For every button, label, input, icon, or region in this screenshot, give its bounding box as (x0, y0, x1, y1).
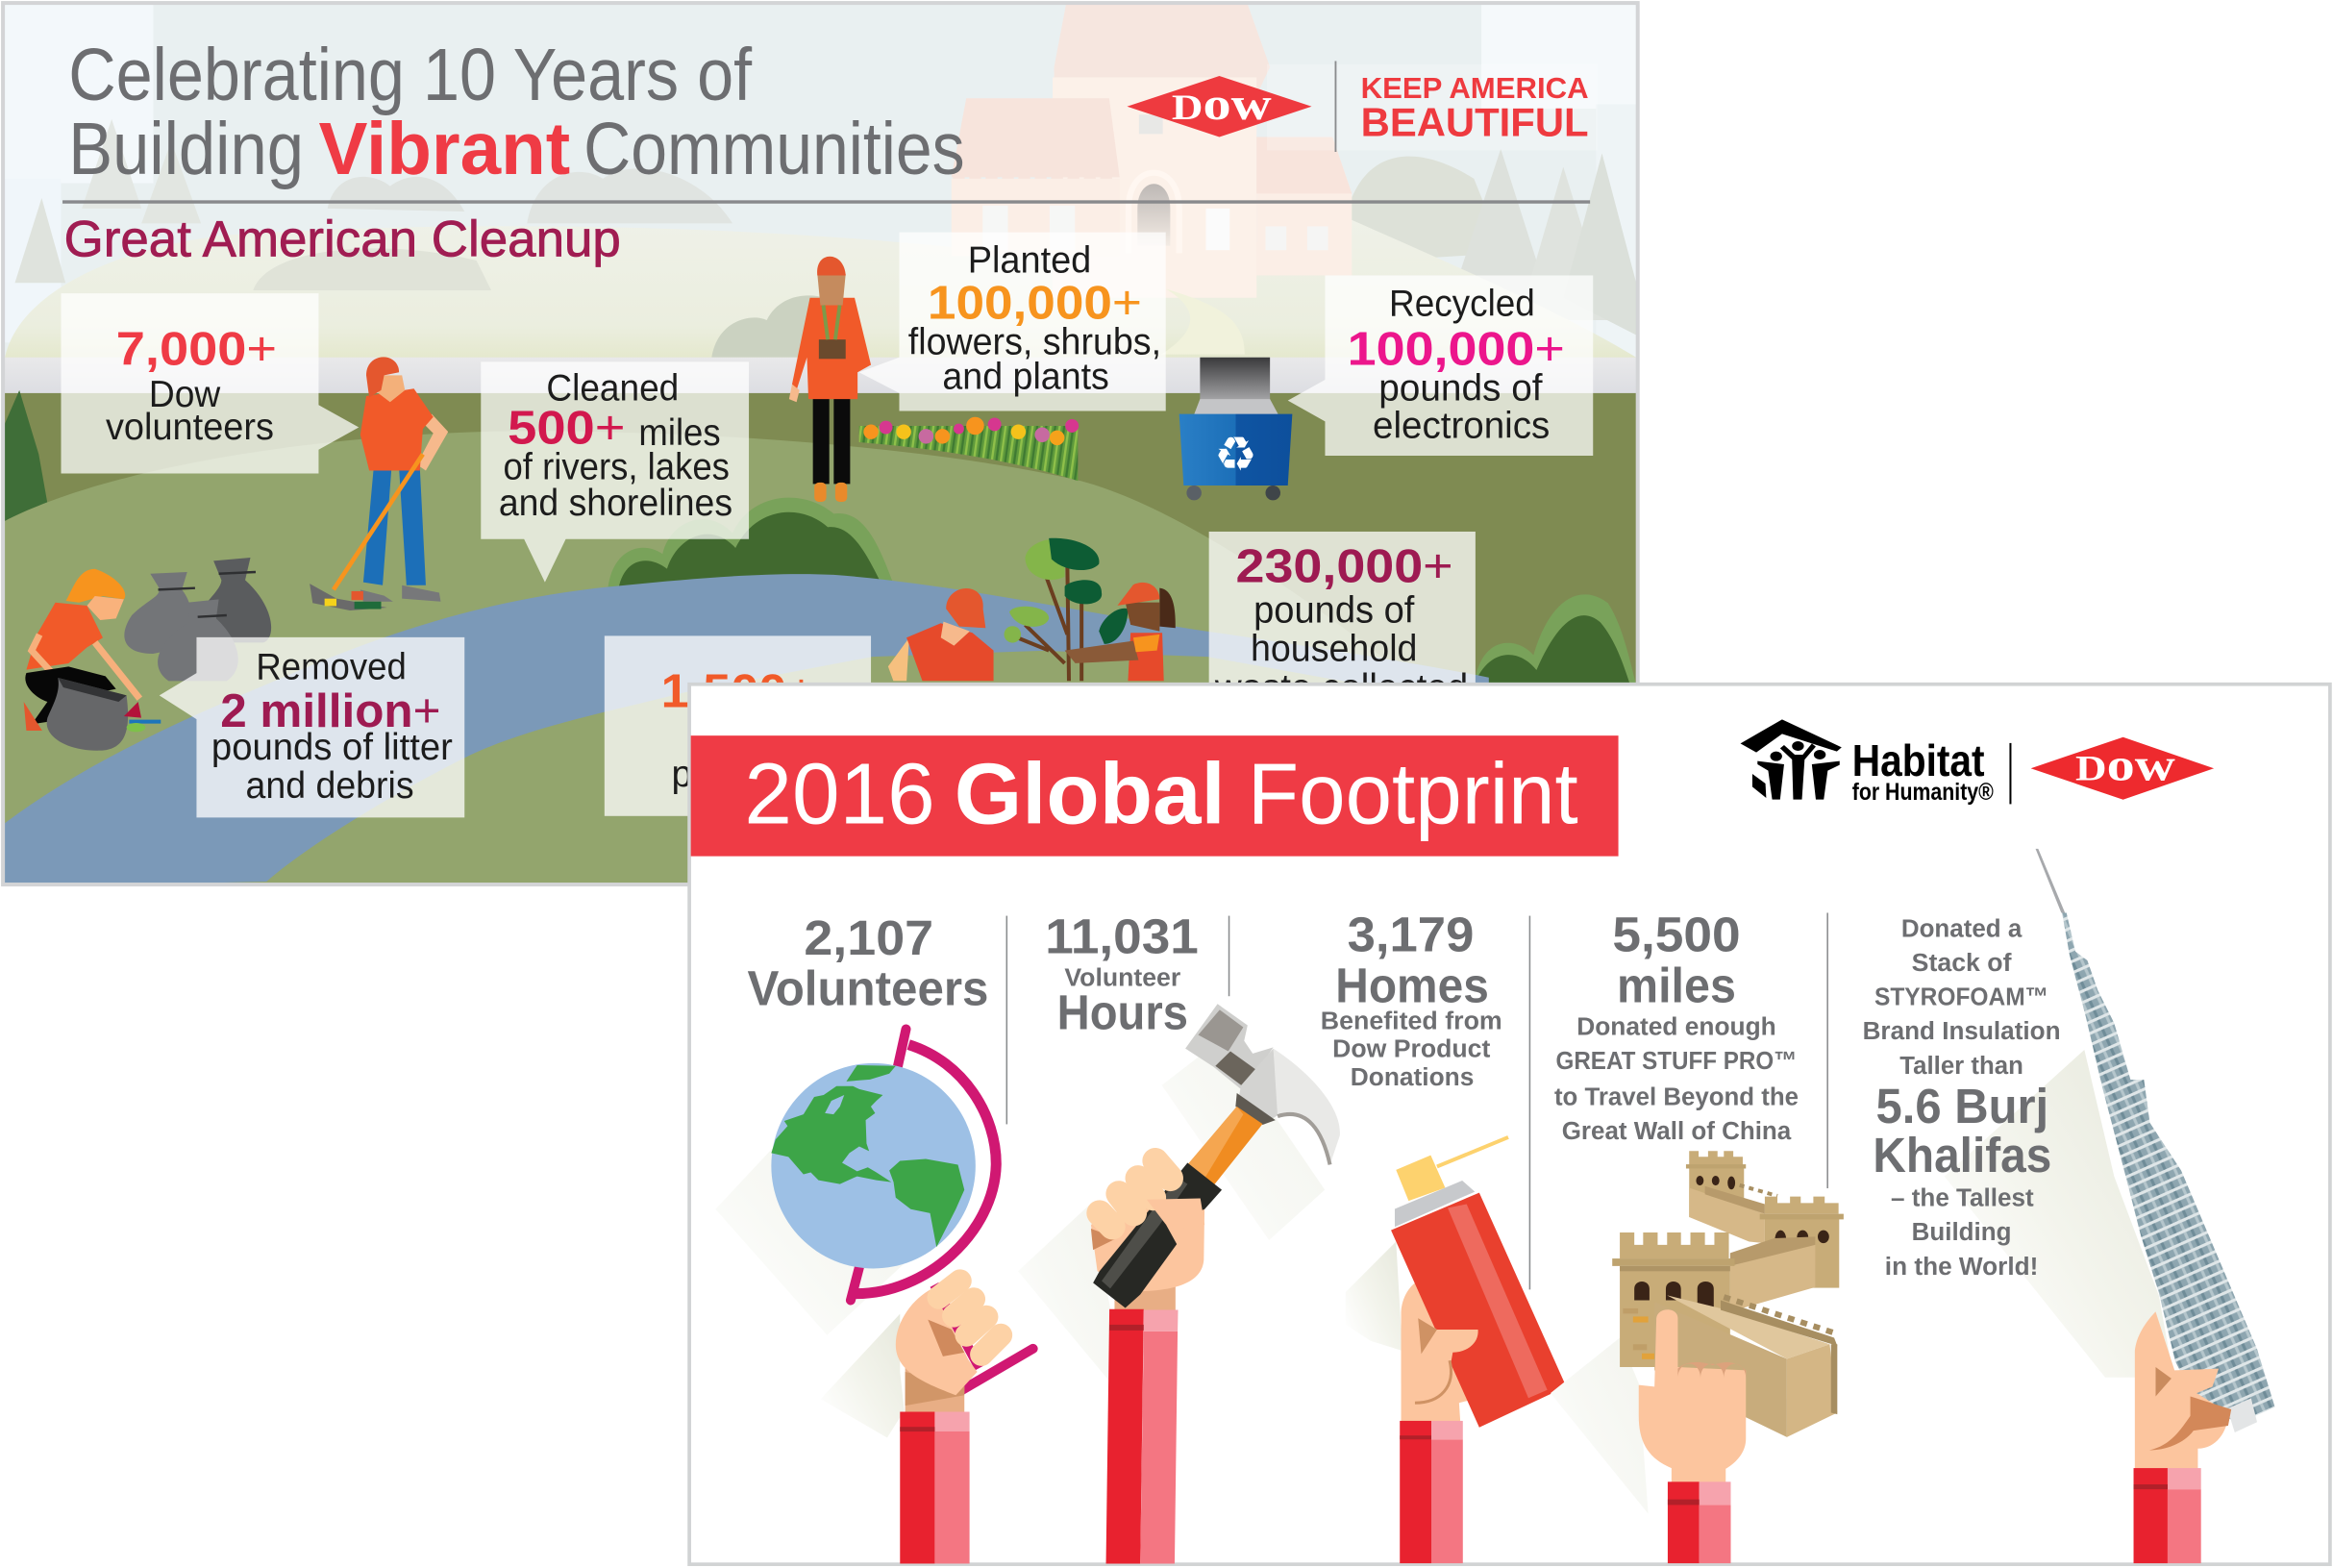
person: planting woman (789, 257, 871, 502)
callout: planted (859, 233, 1166, 411)
logo divider (2009, 743, 2011, 804)
sleeve: arm four (1668, 1481, 1730, 1563)
stat: Burj Khalifas: Taller than (1899, 1051, 2023, 1080)
stat: miles (1554, 908, 1799, 1145)
stat: homes: Donations (1351, 1062, 1474, 1091)
stat: Burj Khalifas: – the Tallest (1891, 1183, 2034, 1212)
callout: volunteers: Dow (149, 374, 221, 415)
callout: partly hidden: 1,500 + (661, 666, 816, 718)
stat: Burj Khalifas (1863, 913, 2061, 1281)
stat: homes: 3,179 (1348, 908, 1474, 962)
title: Celebrating 10 Years of (68, 34, 753, 116)
recycling bin with laptop: ♻ (1214, 426, 1257, 482)
logo: Dow: Dow (2075, 740, 2175, 791)
illustration: hand holding hammer (1018, 1004, 1340, 1387)
logo: Habitat for Humanity: for Humanity® (1852, 780, 1994, 806)
column divider (1006, 916, 1007, 1124)
person: kneeling woman with bag (24, 569, 161, 751)
pale patch behind logos (1267, 64, 1598, 150)
stat: volunteer hours: 11,031 (1045, 908, 1199, 963)
callout: partly hidden: pounds (672, 754, 794, 795)
title: Vibrant (318, 108, 570, 190)
sleeve: arm two (1106, 1309, 1179, 1563)
title: Communities (583, 108, 965, 190)
callout: litter removed: 2 million+ (220, 685, 440, 737)
callout: household waste: household (1251, 629, 1417, 670)
callout: planted: and plants (942, 356, 1109, 397)
illustration: Great Wall (1551, 1151, 1844, 1514)
pale path (1161, 288, 1245, 355)
logo: Keep America Beautiful: BEAUTIFUL (1361, 100, 1589, 145)
logo divider (1335, 62, 1336, 152)
olive ground (5, 392, 1636, 683)
callout: miles cleaned: Cleaned (546, 368, 679, 410)
illustration: hand holding tower (2135, 1311, 2231, 1469)
logo: Dow (2031, 737, 2214, 800)
landscape background (5, 5, 1636, 391)
sleeve: arm five (2134, 1468, 2201, 1563)
panel: Great American Cleanup (3, 3, 1638, 887)
illustration: hand holding globe (715, 1029, 1033, 1438)
stat: Burj Khalifas: STYROFOAM™ (1874, 983, 2048, 1011)
callout: litter removed: pounds of litter (211, 727, 453, 768)
panel: 2016 Global Footprint (689, 684, 2330, 1564)
stat: miles: Donated enough (1576, 1011, 1776, 1040)
stat: volunteers: Volunteers (748, 961, 988, 1016)
stat: volunteer hours (1045, 908, 1199, 1039)
stat: volunteers (748, 910, 988, 1016)
callout: household waste: waste collected (1214, 667, 1468, 709)
callout: miles cleaned: miles (638, 412, 721, 454)
logo: Dow: Dow (1172, 79, 1272, 130)
callout: litter removed (160, 637, 464, 817)
callout: recycled: 100,000 + (1348, 323, 1565, 375)
callout: miles cleaned: of rivers, lakes (504, 447, 730, 488)
stat: miles: to Travel Beyond the (1554, 1082, 1799, 1110)
left tree (5, 390, 51, 521)
sleeve: arm three (1400, 1421, 1463, 1563)
stat: miles: 5,500 (1612, 908, 1741, 962)
tree sapling (1005, 538, 1128, 681)
callout: household waste: 230,000 + (1236, 541, 1453, 593)
stat: volunteer hours: Hours (1057, 984, 1188, 1039)
logo: Dow: ® (2167, 784, 2175, 798)
stat: miles: GREAT STUFF PRO™ (1556, 1046, 1797, 1075)
banner: 2016 (744, 747, 935, 843)
pale bushes on the hill (253, 248, 491, 290)
callout: planted: flowers, shrubs, (908, 322, 1161, 363)
illustration: Burj Khalifa tower (2036, 849, 2275, 1432)
banner (691, 735, 1619, 857)
banner: Global (955, 747, 1226, 843)
panel background (689, 684, 2330, 1564)
stat: Burj Khalifas: Building (1912, 1217, 2011, 1246)
logo: Habitat for Humanity (1741, 719, 1994, 806)
logo: Keep America Beautiful (1361, 71, 1589, 145)
callout: household waste (1209, 532, 1476, 800)
callout: recycled: Recycled (1389, 283, 1535, 324)
person: man raking (310, 357, 448, 610)
logo: Dow (1127, 76, 1312, 137)
callout: recycled (1288, 276, 1593, 456)
pale hills (5, 220, 1636, 358)
sleeve: arm one (900, 1412, 970, 1563)
title: Building (68, 108, 304, 190)
light green front hill (5, 432, 1209, 883)
callout: recycled: electronics (1373, 405, 1550, 446)
grey band (5, 358, 1636, 394)
column divider (1529, 916, 1530, 1289)
callout: volunteers: volunteers (106, 407, 274, 448)
panel border (3, 3, 1638, 884)
river (5, 574, 1489, 887)
callout: partly hidden (605, 635, 871, 816)
stat: volunteers: 2,107 (804, 910, 933, 965)
callout: volunteers: 7,000 + (116, 323, 277, 375)
bush: centre (608, 498, 893, 592)
subtitle: Great American Cleanup (64, 211, 621, 267)
column divider (1826, 912, 1828, 1188)
stat: Burj Khalifas: Brand Insulation (1863, 1016, 2061, 1045)
callout: miles cleaned (481, 361, 749, 583)
stat: miles: Great Wall of China (1562, 1116, 1792, 1145)
stat: Burj Khalifas: Donated a (1901, 913, 2023, 942)
callout: miles cleaned: 500 + (508, 403, 626, 455)
stat: Burj Khalifas: Khalifas (1873, 1128, 2051, 1182)
illustration: pointing hand (1639, 1309, 1746, 1482)
stat: homes (1321, 908, 1502, 1091)
person: man planting tree (888, 588, 994, 681)
callout: recycled: pounds of (1378, 368, 1543, 410)
recycling bin with laptop (1179, 358, 1292, 500)
callout: litter removed: and debris (246, 765, 414, 807)
stat: Burj Khalifas: in the World! (1885, 1252, 2038, 1281)
stat: miles: miles (1617, 958, 1736, 1012)
banner: Footprint (1248, 747, 1578, 843)
callout: planted: Planted (968, 239, 1091, 281)
illustration: hand holding spray can (1346, 1137, 1566, 1428)
person: woman planting tree (1065, 583, 1176, 681)
logo: Keep America Beautiful: KEEP AMERICA (1361, 71, 1589, 105)
stat: homes: Benefited from (1321, 1006, 1502, 1034)
title rule (62, 200, 1590, 204)
stat: homes: Homes (1335, 958, 1489, 1012)
callout: miles cleaned: and shorelines (499, 483, 732, 524)
logo: Habitat for Humanity: Habitat (1852, 735, 1985, 785)
callout: volunteers (62, 293, 359, 474)
stat: Burj Khalifas: Stack of (1912, 948, 2012, 977)
stat: Burj Khalifas: 5.6 Burj (1876, 1079, 2048, 1133)
shadow of tower (1945, 1050, 2173, 1378)
title (68, 34, 965, 190)
stat: volunteer hours: Volunteer (1064, 962, 1180, 991)
callout: litter removed: Removed (256, 646, 407, 687)
stat: homes: Dow Product (1332, 1034, 1491, 1063)
callout: household waste: pounds of (1253, 589, 1415, 631)
illustration: house (952, 5, 1352, 298)
trash bags (124, 558, 271, 681)
flower bed (859, 417, 1079, 481)
callout: planted: 100,000 + (928, 277, 1142, 329)
bush: right (1474, 594, 1636, 684)
bush behind planting woman (711, 296, 819, 358)
